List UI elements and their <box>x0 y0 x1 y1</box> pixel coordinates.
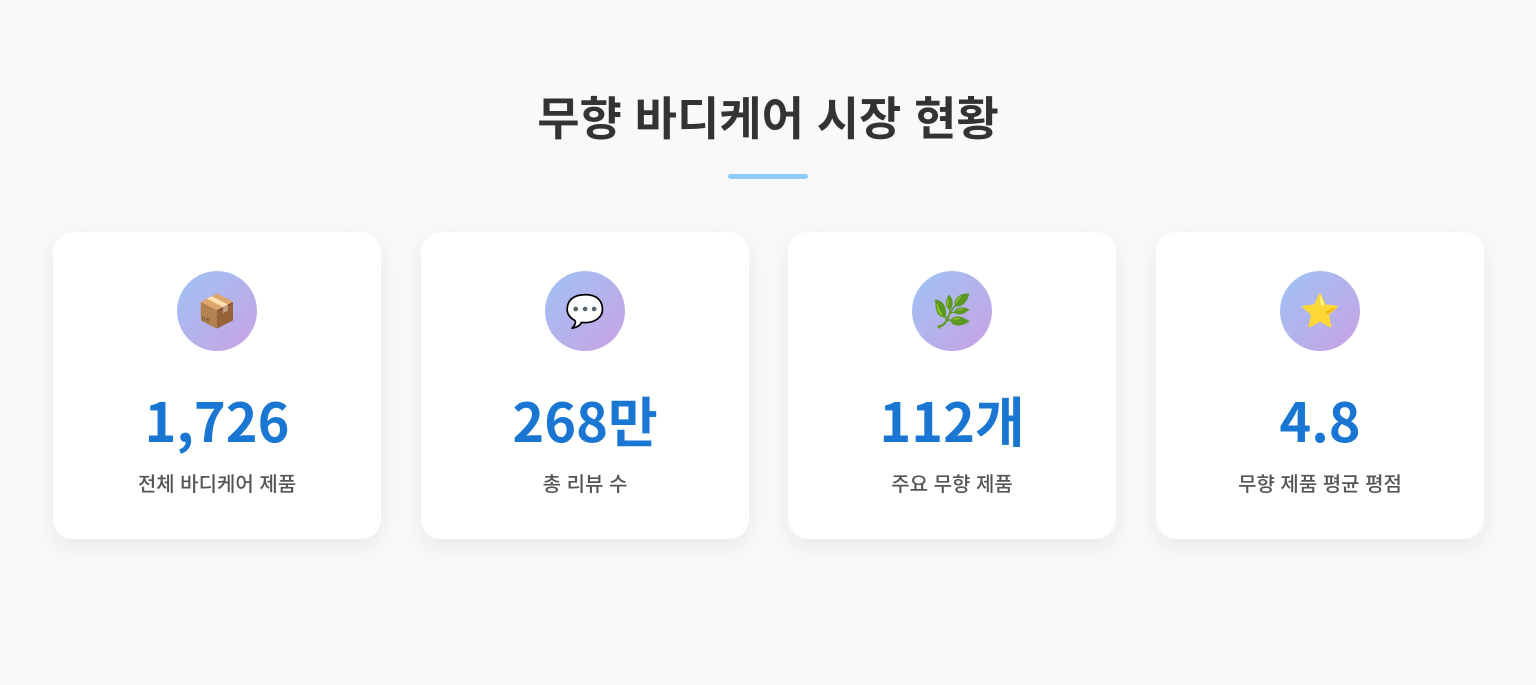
panel: average rating <box>1156 232 1484 539</box>
icon: star: ⭐ <box>1300 292 1340 330</box>
icon: star <box>1280 271 1360 351</box>
icon: speech bubble: 💬 <box>565 292 605 330</box>
title underline <box>728 174 808 179</box>
panel: total reviews <box>421 232 749 539</box>
label: total reviews: 총 리뷰 수 <box>543 474 627 496</box>
number: total products: 1,726 <box>144 379 290 458</box>
number: total reviews: 268만 <box>512 379 658 458</box>
label: key products: 주요 무향 제품 <box>891 474 1013 496</box>
icon: speech bubble <box>545 271 625 351</box>
number: key products: 112개 <box>879 379 1025 458</box>
panel: key unscented products <box>788 232 1116 539</box>
label: average rating: 무향 제품 평균 평점 <box>1238 474 1402 496</box>
icon: box <box>177 271 257 351</box>
panel: total products <box>53 232 381 539</box>
icon: box: 📦 <box>197 292 237 330</box>
label: total products: 전체 바디케어 제품 <box>138 474 296 496</box>
number: average rating: 4.8 <box>1279 379 1361 458</box>
icon: leaf <box>912 271 992 351</box>
title: 무향 바디케어 시장 현황 <box>537 93 999 145</box>
icon: leaf: 🌿 <box>932 292 972 330</box>
